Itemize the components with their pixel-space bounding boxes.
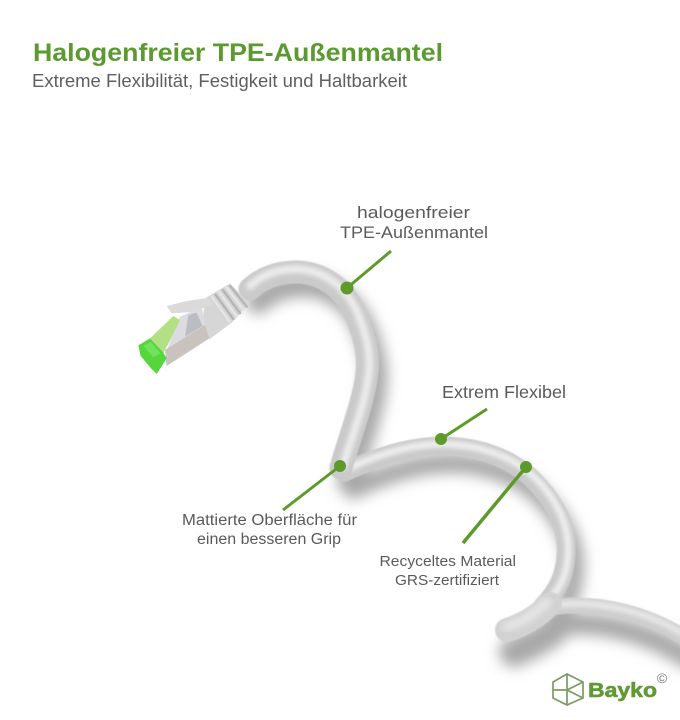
callout: halogenfreier TPE-Außenmantel (340, 203, 488, 294)
connector latch (167, 298, 214, 313)
callout label line 1: Mattierte Oberfläche für (182, 512, 357, 529)
callout label: Extrem Flexibel (442, 382, 566, 402)
callout label line 1: halogenfreier (357, 203, 470, 222)
cable (250, 269, 680, 641)
callout leader (347, 251, 391, 288)
icon: hexagon cube (553, 674, 583, 705)
connector green insert (150, 316, 180, 353)
logo wordmark: Bayko (588, 679, 657, 702)
cable upper arc segment (250, 269, 369, 468)
connector boot (202, 283, 249, 339)
connector metal shield (167, 307, 205, 350)
callout label line 1: Recyceltes Material (380, 553, 516, 570)
callout leader (441, 409, 487, 439)
callout leader (463, 467, 526, 543)
logo: Bayko (553, 670, 668, 705)
title: Halogenfreier TPE-Außenmantel (33, 39, 443, 67)
callout label line 2: GRS-zertifiziert (395, 572, 500, 589)
subtitle: Extreme Flexibilität, Festigkeit und Haltbarkeit (32, 71, 407, 91)
callout: Extrem Flexibel (435, 382, 566, 445)
callout label line 2: TPE-Außenmantel (340, 223, 488, 242)
icon: RJ45 connector (138, 283, 249, 374)
copyright mark: © (657, 670, 668, 686)
callout: Recyceltes Material (380, 461, 532, 589)
callout label line 2: einen besseren Grip (197, 531, 341, 548)
cable loop end (507, 602, 550, 630)
callout leader (283, 466, 340, 510)
cable loop segment (345, 444, 568, 606)
cable shadow (258, 285, 680, 659)
callout: Mattierte Oberfläche (182, 460, 357, 548)
cable tail segment (555, 604, 680, 641)
